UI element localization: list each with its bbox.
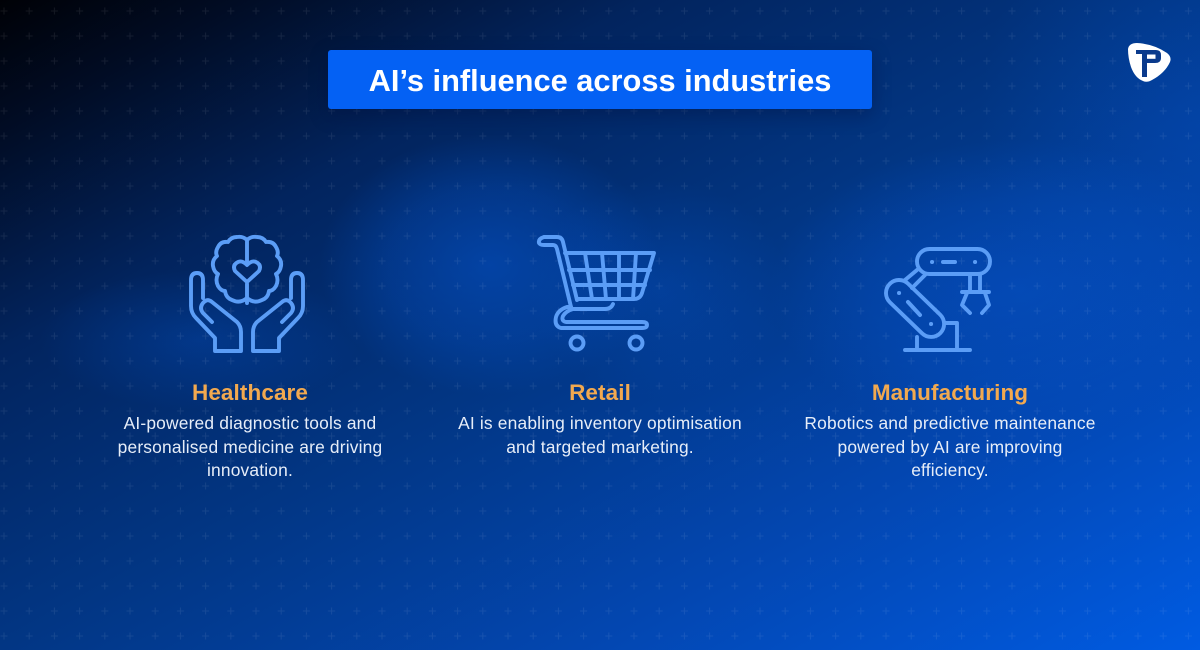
text: manufacturing description: efficiency. bbox=[911, 460, 989, 480]
text: manufacturing description: powered by AI are improving bbox=[838, 437, 1062, 457]
text: healthcare description bbox=[118, 413, 382, 480]
heading: Healthcare: Healthcare bbox=[192, 380, 308, 405]
text: healthcare description: personalised medicine are driving bbox=[118, 437, 382, 457]
title banner: AI’s influence across industries bbox=[369, 63, 831, 98]
heading: Retail: Retail bbox=[569, 380, 631, 405]
icon: shopping cart bbox=[536, 235, 656, 352]
icon: brand logo bbox=[1128, 43, 1171, 82]
text: retail description bbox=[458, 413, 742, 457]
text: healthcare description: innovation. bbox=[207, 460, 293, 480]
text: retail description: and targeted marketing. bbox=[506, 437, 694, 457]
text: manufacturing description bbox=[804, 413, 1096, 480]
heading: Manufacturing: Manufacturing bbox=[872, 380, 1028, 405]
icon: healthcare brain in hands bbox=[189, 234, 305, 353]
icon: robotic arm bbox=[884, 247, 992, 352]
text: retail description: AI is enabling inventory optimisation bbox=[458, 413, 742, 433]
text: manufacturing description: Robotics and predictive maintenance bbox=[804, 413, 1096, 433]
title banner bbox=[328, 50, 872, 109]
text: healthcare description: AI-powered diagnostic tools and bbox=[124, 413, 376, 433]
